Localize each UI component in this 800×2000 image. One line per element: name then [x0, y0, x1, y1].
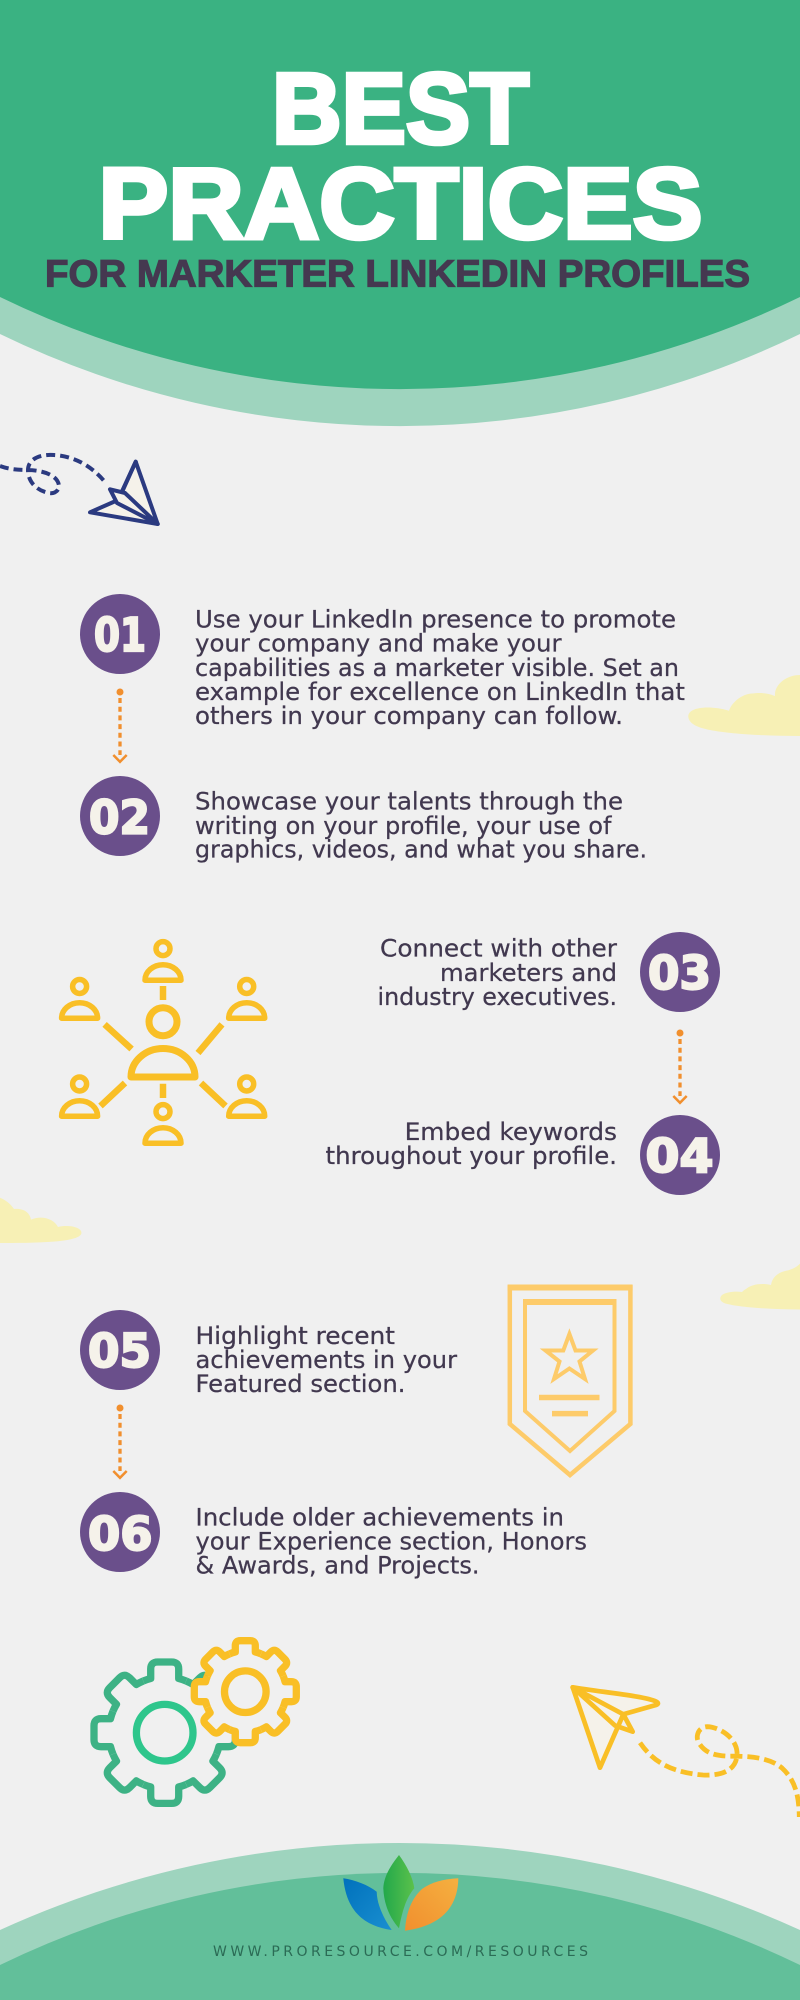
text: step 02: Showcase your talents through the [195, 787, 623, 815]
step 01: 01 [94, 608, 146, 662]
text: step 03: industry executives. [378, 983, 617, 1011]
text: step 02: writing on your profile, your use of [195, 812, 612, 840]
green gear [94, 1662, 235, 1803]
step 04: 04 [646, 1129, 714, 1183]
yellow gear [194, 1641, 296, 1743]
person: bottom right [229, 1077, 265, 1116]
step 05: 05 [88, 1324, 151, 1378]
text: step 01: your company and make your [195, 630, 562, 658]
website url: WWW.PRORESOURCE.COM/RESOURCES [213, 1944, 588, 1960]
text: step 05 [196, 1322, 457, 1398]
step 02: 02 [89, 790, 150, 844]
text: step 01 [195, 606, 685, 730]
logo [343, 1855, 458, 1931]
text: step 03: Connect with other [380, 935, 617, 963]
text: step 01: capabilities as a marketer visible. Set an [195, 654, 679, 682]
text: step 01: example for excellence on LinkedIn that [195, 678, 685, 706]
person: top left [62, 980, 98, 1018]
footer banner [0, 1843, 800, 2000]
title: PRACTICES [98, 148, 702, 260]
arrow: 01 to 02 [113, 688, 127, 762]
text: step 06: Include older achievements in [196, 1504, 564, 1532]
text: step 03 [378, 935, 617, 1011]
step 06: 06 [88, 1507, 152, 1561]
icon: yellow paper airplane with dashed trail [573, 1687, 799, 1817]
title [98, 53, 702, 260]
person: bottom left [62, 1077, 98, 1116]
cloud: upper right [688, 675, 800, 736]
star [546, 1334, 593, 1379]
icon: award badge [508, 1288, 633, 1475]
connectors [100, 986, 226, 1106]
step 04 [326, 1115, 720, 1195]
arrow: 03 to 04 [673, 1030, 687, 1103]
step 01 [80, 594, 685, 730]
text: step 04: throughout your profile. [326, 1142, 617, 1170]
step 02 [80, 776, 647, 864]
person: top right [229, 980, 265, 1018]
text: step 05: achievements in your [196, 1346, 457, 1374]
person: top [145, 942, 181, 980]
text: step 04 [326, 1118, 617, 1170]
text: step 06: & Awards, and Projects. [196, 1552, 480, 1580]
icon: gears [94, 1641, 296, 1803]
text: step 05: Highlight recent [196, 1322, 395, 1350]
step 03: 03 [648, 946, 711, 1000]
icon: blue paper airplane with dashed trail [0, 455, 158, 524]
text: step 01: others in your company can follow. [195, 702, 623, 730]
arrow: 05 to 06 [113, 1404, 127, 1478]
step 06 [80, 1492, 587, 1580]
step 05 [80, 1310, 457, 1398]
text: step 05: Featured section. [196, 1370, 406, 1398]
step 03 [378, 932, 720, 1012]
text: step 02: graphics, videos, and what you share. [195, 836, 647, 864]
person: center [131, 1008, 195, 1077]
text: step 02 [195, 787, 647, 864]
text: step 03: marketers and [440, 959, 617, 987]
text: step 04: Embed keywords [405, 1118, 617, 1146]
cloud: middle left [0, 1198, 81, 1243]
text: step 06: your Experience section, Honors [196, 1528, 587, 1556]
title: BEST [272, 53, 529, 165]
text: step 01: Use your LinkedIn presence to promote [195, 606, 676, 634]
header banner [0, 0, 800, 426]
text: step 06 [196, 1504, 587, 1580]
cloud: middle right [720, 1264, 800, 1310]
person: bottom [145, 1105, 181, 1143]
icon: people network [62, 942, 265, 1143]
subtitle: FOR MARKETER LINKEDIN PROFILES [45, 254, 750, 296]
